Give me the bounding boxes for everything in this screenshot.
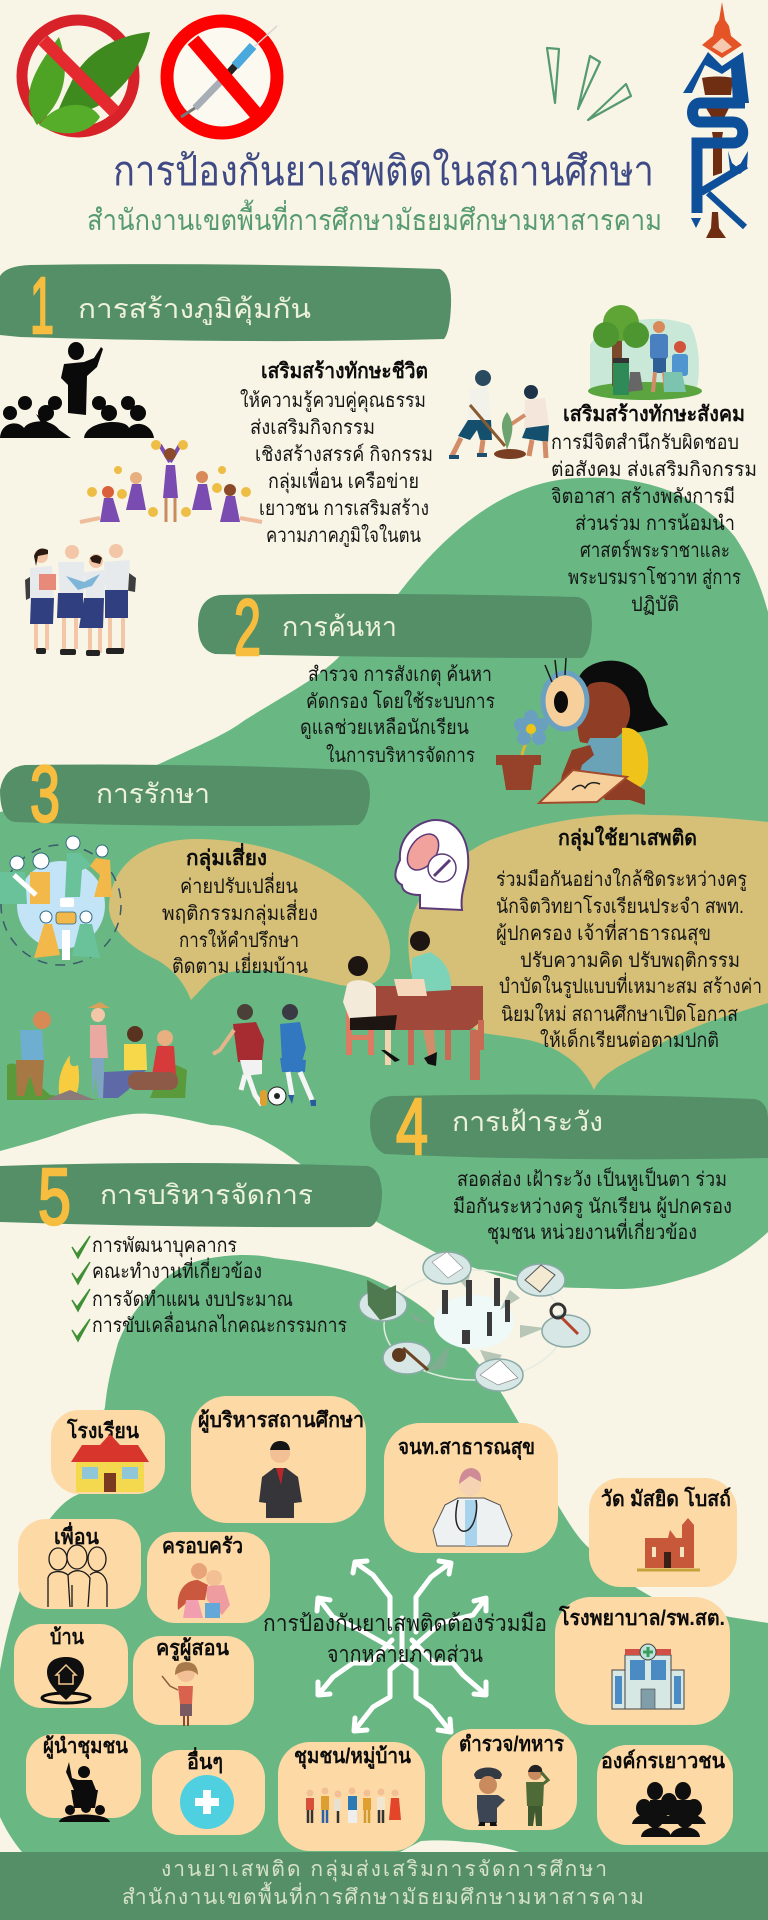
callout: at-risk group: การให้คำปรึกษา bbox=[179, 929, 299, 952]
text block: social skills: เสริมสร้างทักษะสังคม bbox=[563, 402, 745, 426]
section 5 banner: การบริหารจัดการ bbox=[100, 1180, 313, 1210]
card: public health officer: จนท.สาธารณสุข bbox=[398, 1436, 535, 1461]
icon: girl with magnifying glass bbox=[496, 658, 668, 805]
callout: drug users group: กลุ่มใช้ยาเสพติด bbox=[558, 825, 697, 852]
icon: children planting a tree bbox=[449, 370, 549, 459]
card: community bbox=[278, 1742, 425, 1851]
text block: social skills: จิตอาสา สร้างพลังการมี bbox=[551, 486, 735, 508]
icon: no-leaf prohibition sign bbox=[22, 20, 150, 133]
section 2 banner: การค้นหา bbox=[282, 612, 397, 642]
icon: students group bbox=[25, 544, 136, 656]
callout: at-risk group: ค่ายปรับเปลี่ยน bbox=[180, 872, 298, 898]
card: religious places: วัด มัสยิด โบสถ์ bbox=[601, 1486, 731, 1511]
checklist: management: การจัดทำแผน งบประมาณ bbox=[92, 1289, 293, 1311]
footer: งานยาเสพติด กลุ่มส่งเสริมการจัดการศึกษา bbox=[161, 1858, 607, 1882]
callout: drug users group: นิยมใหม่ สถานศึกษาเปิดโอกาส bbox=[501, 1003, 738, 1026]
card: friends: เพื่อน bbox=[54, 1521, 100, 1549]
section 1 banner: 1 bbox=[30, 261, 54, 350]
card: school bbox=[51, 1410, 165, 1494]
icon: teamwork circle bbox=[0, 836, 121, 965]
text block: life skills: เยาวชน การเสริมสร้าง bbox=[259, 498, 429, 520]
card: school administrator: ผู้บริหารสถานศึกษา bbox=[198, 1408, 364, 1434]
text block: social skills: ต่อสังคม ส่งเสริมกิจกรรม bbox=[551, 459, 757, 481]
section 4 banner bbox=[370, 1082, 768, 1171]
section 3 banner: การรักษา bbox=[96, 779, 210, 809]
section 1 banner: การสร้างภูมิคุ้มกัน bbox=[78, 294, 311, 326]
checklist: management bbox=[72, 1235, 347, 1341]
text block: screening: สำรวจ การสังเกตุ ค้นหา bbox=[308, 664, 492, 687]
background blob: lower green bbox=[0, 1255, 768, 1852]
icon: no-syringe prohibition sign bbox=[167, 21, 277, 133]
card: police and soldier bbox=[442, 1729, 577, 1830]
text block: monitoring: สอดส่อง เฝ้าระวัง เป็นหูเป็นตา ร่วม bbox=[457, 1166, 727, 1192]
text block: screening bbox=[300, 664, 495, 767]
text block: life skills: กลุ่มเพื่อน เครือข่าย bbox=[268, 467, 419, 494]
callout: at-risk group: กลุ่มเสี่ยง bbox=[186, 842, 267, 872]
text block: screening: ดูแลช่วยเหลือนักเรียน bbox=[300, 717, 469, 740]
text block: life skills: เชิงสร้างสรรค์ กิจกรรม bbox=[255, 443, 433, 466]
callout: drug users group: ปรับความคิด ปรับพฤติกรรม bbox=[520, 950, 740, 972]
card: others: อื่นๆ bbox=[187, 1746, 223, 1774]
card: community leader bbox=[26, 1734, 141, 1822]
callout: drug users group: ผู้ปกครอง เจ้าที่สาธารณสุข bbox=[496, 919, 711, 946]
card: friends bbox=[18, 1519, 141, 1609]
callout: at-risk group: พฤติกรรมกลุ่มเสี่ยง bbox=[162, 899, 318, 926]
text block: social skills: การมีจิตสำนึกรับผิดชอบ bbox=[551, 432, 739, 454]
section 5 banner: 5 bbox=[38, 1152, 71, 1241]
footer: สำนักงานเขตพื้นที่การศึกษามัธยมศึกษามหาสารคาม bbox=[122, 1882, 644, 1909]
background blob: upper green bbox=[0, 478, 768, 1289]
center message: การป้องกันยาเสพติดต้องร่วมมือ bbox=[263, 1610, 547, 1636]
text block: social skills bbox=[551, 402, 757, 616]
card: home: บ้าน bbox=[50, 1625, 85, 1649]
decorative green darts bbox=[547, 48, 631, 120]
card: youth organisation bbox=[597, 1745, 733, 1845]
text block: life skills: เสริมสร้างทักษะชีวิต bbox=[261, 359, 428, 383]
icon: cheerleaders bbox=[80, 440, 262, 522]
icon: MSK logo bbox=[683, 2, 749, 238]
text block: screening: ในการบริหารจัดการ bbox=[326, 744, 475, 767]
icon: speaker and audience bbox=[0, 342, 154, 438]
section 4 banner: การเฝ้าระวัง bbox=[452, 1107, 603, 1137]
title: การป้องกันยาเสพติดในสถานศึกษา bbox=[113, 148, 654, 194]
card: hospital: โรงพยาบาล/รพ.สต. bbox=[558, 1605, 725, 1630]
callout: drug users group bbox=[408, 814, 768, 1090]
subtitle: สำนักงานเขตพื้นที่การศึกษามัธยมศึกษามหาสารคาม bbox=[87, 199, 662, 237]
card: youth organisation: องค์กรเยาวชน bbox=[601, 1749, 726, 1773]
section 2 banner: 2 bbox=[234, 583, 261, 672]
card: home bbox=[14, 1624, 128, 1708]
card: police and soldier: ตำรวจ/ทหาร bbox=[459, 1733, 565, 1756]
icon: campfire friends bbox=[7, 1002, 187, 1100]
callout: at-risk group: ติดตาม เยี่ยมบ้าน bbox=[172, 952, 308, 978]
card: community leader: ผู้นำชุมชน bbox=[43, 1734, 129, 1760]
card: family bbox=[147, 1532, 270, 1623]
text block: monitoring: มือกันระหว่างครู นักเรียน ผู้ปกครอง bbox=[453, 1196, 732, 1219]
icon: head with pills bbox=[395, 820, 468, 910]
icon: boys playing football bbox=[213, 1004, 316, 1106]
text block: monitoring: ชุมชน หน่วยงานที่เกี่ยวข้อง bbox=[487, 1218, 697, 1245]
section 4 banner: 4 bbox=[396, 1082, 428, 1171]
section 3 banner bbox=[0, 749, 370, 838]
footer bbox=[0, 1852, 768, 1920]
card: school administrator bbox=[191, 1396, 366, 1523]
callout: drug users group: นักจิตวิทยาโรงเรียนประจำ สพท. bbox=[496, 895, 744, 918]
text block: social skills: พระบรมราโชวาท สู่การ bbox=[568, 566, 741, 590]
card: teacher: ครูผู้สอน bbox=[156, 1636, 230, 1662]
section 5 banner bbox=[0, 1152, 382, 1241]
section 3 banner: 3 bbox=[30, 749, 60, 838]
card: school: โรงเรียน bbox=[66, 1418, 140, 1443]
text block: social skills: ส่วนร่วม การน้อมนำ bbox=[575, 513, 735, 535]
card: others bbox=[152, 1746, 265, 1835]
text block: screening: คัดกรอง โดยใช้ระบบการ bbox=[306, 690, 495, 713]
text block: life skills: ส่งเสริมกิจกรรม bbox=[250, 417, 375, 439]
callout: at-risk group bbox=[109, 839, 390, 1000]
section 2 banner bbox=[198, 583, 592, 672]
checklist: management: การพัฒนาบุคลากร bbox=[92, 1235, 237, 1258]
card: community: ชุมชน/หมู่บ้าน bbox=[294, 1744, 412, 1770]
card: religious places bbox=[589, 1478, 737, 1587]
text block: monitoring bbox=[453, 1166, 732, 1245]
center message bbox=[263, 1610, 547, 1667]
center message: จากหลายภาคส่วน bbox=[327, 1641, 483, 1667]
icon: management cycle diagram bbox=[359, 1252, 590, 1391]
text block: social skills: ศาสตร์พระราชาและ bbox=[580, 539, 730, 562]
card: hospital bbox=[555, 1597, 730, 1725]
section 1 banner bbox=[0, 261, 451, 350]
card: teacher bbox=[133, 1636, 254, 1726]
checklist: management: การขับเคลื่อนกลไกคณะกรรมการ bbox=[92, 1311, 347, 1337]
text block: life skills bbox=[240, 359, 433, 548]
icon: counselling at desk bbox=[343, 931, 484, 1080]
text block: life skills: ความภาคภูมิใจในตน bbox=[266, 524, 421, 548]
checklist: management: คณะทำงานที่เกี่ยวข้อง bbox=[92, 1257, 262, 1283]
text block: life skills: ให้ความรู้ควบคู่คุณธรรม bbox=[240, 389, 426, 413]
arrows: collaboration network bbox=[317, 1561, 486, 1732]
card: family: ครอบครัว bbox=[162, 1535, 243, 1558]
icon: environment clean-up scene bbox=[588, 305, 702, 400]
text block: social skills: ปฏิบัติ bbox=[631, 594, 679, 616]
callout: drug users group: ให้เด็กเรียนต่อตามปกติ bbox=[540, 1027, 719, 1052]
card: public health officer bbox=[384, 1423, 558, 1553]
